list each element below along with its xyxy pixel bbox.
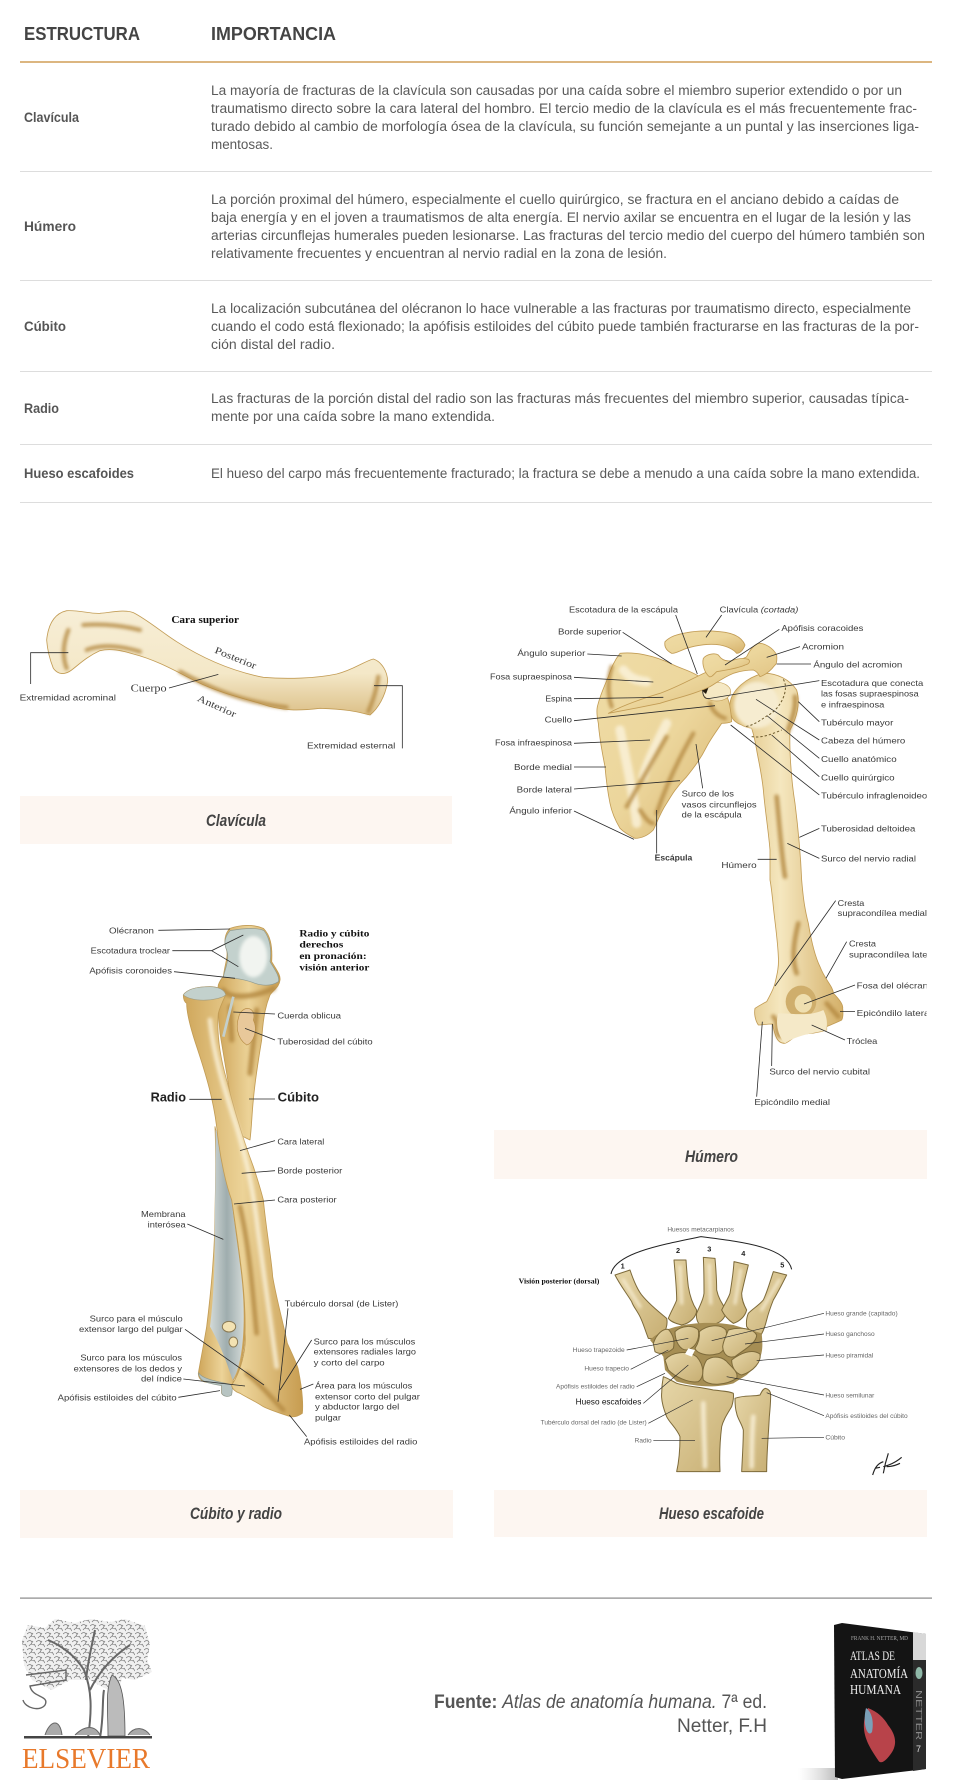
illustration: wrist: [519, 1228, 908, 1475]
leader lines: [158, 929, 313, 1437]
labels: extensor corto del pulgar: [315, 1391, 420, 1401]
labels: Fosa del olécranon: [857, 980, 939, 990]
illustration: shoulder and humerus: [490, 604, 939, 1107]
source credit: Netter, F.H: [677, 1716, 767, 1737]
labels: Apófisis estiloides del cúbito: [58, 1393, 177, 1403]
labels: Escotadura de la escápula: [569, 604, 678, 614]
labels: Hueso semilunar: [825, 1394, 874, 1400]
label: Cuerpo: Cuerpo: [131, 684, 167, 695]
row: Húmero: baja energía y en el joven a traumatismos de alta energía. El nervio axilar se encuentra en el lugar de la lesión y las: [211, 210, 911, 225]
row: Cúbito: La localización subcutánea del olécranon lo hace vulnerable a las fracturas por traumatismo directo, especialmente: [211, 301, 911, 316]
bone: radius: [183, 987, 303, 1417]
labels: Membrana: [141, 1209, 186, 1219]
leader lines: [31, 653, 402, 748]
row: Cúbito: ción distal del radio.: [211, 337, 335, 352]
labels: Cuello anatómico: [821, 754, 897, 764]
labels: Cresta: [849, 939, 876, 949]
labels: extensor largo del pulgar: [79, 1324, 183, 1334]
book cover: Atlas de anatomía humana: FRANK H. NETTER, MD: [851, 1636, 909, 1642]
labels: [541, 1228, 908, 1445]
bones: metacarpals: [615, 1257, 787, 1339]
bone: humerus: [730, 673, 843, 1043]
panel: húmero y escápula: [490, 604, 939, 1107]
book cover: Atlas de anatomía humana: 7: [916, 1744, 921, 1754]
source credit: Fuente: Atlas de anatomía humana. 7ª ed.: [434, 1692, 767, 1713]
labels: Cúbito: [825, 1435, 846, 1441]
label: Visión posterior (dorsal): Visión posterior (dorsal): [519, 1277, 600, 1285]
caption bar: Húmero: [494, 1130, 927, 1179]
labels: Surco del nervio cubital: [769, 1066, 870, 1076]
labels: Húmero: [721, 860, 757, 870]
labels: Escotadura troclear: [91, 945, 170, 955]
labels: Surco del nervio radial: [821, 853, 916, 863]
distal ulna cap: [198, 1373, 233, 1396]
metacarpal numbers: 1: [621, 1261, 625, 1270]
labels: Ángulo superior: [517, 648, 585, 658]
labels: del índice: [141, 1374, 182, 1384]
row: Radio: mente por una caída sobre la mano extendida.: [211, 409, 495, 424]
icon: tree: [22, 1619, 152, 1738]
bone: spine and acromion: [608, 643, 777, 713]
labels: Ángulo inferior: [509, 806, 572, 816]
labels: Tubérculo dorsal del radio (de Lister): [541, 1420, 647, 1426]
heading: Radio y cúbito derechos: derechos: [299, 941, 344, 951]
bone: distal radius: [662, 1377, 734, 1472]
bone: clavicle cut: [665, 631, 745, 653]
scapula details: [609, 667, 731, 823]
labels: Radio: [635, 1439, 652, 1445]
labels: Cresta: [838, 898, 865, 908]
labels: pulgar: [315, 1412, 341, 1422]
labels: Borde posterior: [277, 1165, 342, 1175]
wordmark: ELSEVIER: ELSEVIER: [22, 1744, 150, 1775]
labels: Apófisis estiloides del radio: [304, 1436, 418, 1446]
labels: interósea: [148, 1220, 186, 1230]
labels: Apófisis estiloides del cúbito: [825, 1414, 908, 1420]
table header: [20, 24, 932, 63]
row: Húmero: [20, 192, 932, 281]
metacarpal numbers: 2: [676, 1246, 680, 1255]
caption bar: Húmero: Húmero: [685, 1148, 738, 1166]
row: Clavícula: mentosas.: [211, 137, 273, 152]
labels: Cara posterior: [277, 1195, 337, 1205]
metacarpal numbers: 5: [780, 1260, 784, 1269]
labels: Epicóndilo medial: [754, 1097, 830, 1107]
row: Clavícula: Clavícula: [24, 110, 79, 125]
illustration: ulna and radius: [58, 925, 420, 1446]
leader lines: [574, 615, 855, 1097]
panel: cúbito y radio: [58, 925, 420, 1446]
row: Hueso escafoides: El hueso del carpo más frecuentemente fracturado; la fractura se debe a menudo a una caída sobre la mano extendida.: [211, 466, 920, 481]
row: Cúbito: [20, 301, 932, 372]
labels: Hueso grande (capitado): [825, 1312, 898, 1318]
table header: IMPORTANCIA: [211, 24, 336, 44]
bone: clavicle: [47, 611, 388, 715]
labels: Surco para el músculo: [90, 1314, 183, 1324]
labels: Ángulo del acromion: [813, 660, 903, 670]
labels: extensores radiales largo: [314, 1347, 416, 1357]
radius details: [183, 987, 283, 1410]
labels: Hueso piramidal: [825, 1353, 873, 1359]
row: Húmero: relativamente frecuentes y encuentran al nervio radial en la zona de lesión.: [211, 246, 667, 261]
labels: Fosa supraespinosa: [490, 671, 572, 681]
labels: Área para los músculos: [315, 1381, 413, 1391]
labels: e infraespinosa: [821, 699, 885, 709]
labels: Hueso ganchoso: [825, 1332, 875, 1338]
labels: Apófisis coracoides: [781, 623, 864, 633]
labels: supracondílea lateral: [849, 949, 938, 959]
labels: Cuello: [545, 714, 572, 724]
panel: hueso escafoide: [519, 1228, 908, 1475]
label: Cúbito: Cúbito: [278, 1091, 319, 1105]
humerus details: [734, 679, 838, 1043]
labels: vasos circunflejos: [682, 799, 757, 809]
signature: [873, 1453, 902, 1475]
labels: de la escápula: [682, 810, 742, 820]
labels: las fosas supraespinosa: [821, 689, 919, 699]
book cover: Atlas de anatomía humana: ANATOMÍA: [850, 1666, 908, 1681]
row: Clavícula: traumatismo directo sobre la cara lateral del hombro. El tercio medio de la clavícula es el más frecuentemente frac-: [211, 101, 917, 116]
table header: ESTRUCTURA: [24, 24, 140, 44]
interosseous membrane: [210, 1130, 244, 1380]
label: Radio: Radio: [151, 1091, 186, 1105]
labels: Surco para los músculos: [80, 1353, 183, 1363]
labels: Surco de los: [682, 789, 735, 799]
labels: [58, 925, 420, 1446]
bones: carpals: [653, 1326, 760, 1384]
row: Cúbito: cuando el codo está flexionado; la apófisis estiloides del cúbito puede también fracturarse en las fracturas de la por-: [211, 319, 919, 334]
wrist highlights: [703, 1403, 753, 1467]
book cover: Atlas de anatomía humana: [798, 1623, 926, 1780]
labels: Escápula: [655, 853, 693, 863]
labels: Tuberosidad del cúbito: [277, 1036, 373, 1046]
label: Posterior: Posterior: [213, 645, 259, 672]
table: estructura e importancia: [20, 24, 932, 503]
panel: clavícula: [20, 611, 402, 750]
caption bar: Cúbito y radio: [20, 1490, 453, 1538]
labels: supracondílea medial: [838, 908, 927, 918]
labels: Apófisis coronoides: [89, 966, 173, 976]
book cover: Atlas de anatomía humana: NETTER: [914, 1690, 923, 1740]
row: Húmero: arterias circunflejas humerales pueden lesionarse. Las fracturas del tercio medio del cuerpo del húmero también son: [211, 228, 925, 243]
labels: Huesos metacarpianos: [667, 1228, 734, 1234]
row: Húmero: La porción proximal del húmero, especialmente el cuello quirúrgico, se fractura en el anciano debido a caídas de: [211, 192, 899, 207]
ulnar tuberosity: [237, 1008, 255, 1045]
labels: Clavícula (cortada): [720, 604, 798, 614]
book cover: Atlas de anatomía humana: ATLAS DE: [850, 1648, 895, 1663]
label: Extremidad acrominal: Extremidad acrominal: [20, 692, 116, 702]
labels: Cuerda oblicua: [277, 1011, 341, 1021]
caption bar: Hueso escafoide: [494, 1490, 927, 1537]
heading: Radio y cúbito derechos: visión anterior: [299, 963, 369, 973]
metacarpal numbers: 3: [707, 1244, 711, 1253]
labels: Hueso trapecio: [584, 1367, 630, 1373]
labels: y abductor largo del: [315, 1402, 399, 1412]
label: Extremidad esternal: Extremidad esternal: [307, 740, 395, 750]
labels: Cabeza del húmero: [821, 736, 906, 746]
metacarpal numbers: [621, 1244, 784, 1270]
label: Anterior: Anterior: [195, 693, 238, 721]
metacarpal numbers: 4: [741, 1249, 746, 1258]
row: Radio: Las fracturas de la porción distal del radio son las fracturas más frecuentes del miembro superior, causadas típica-: [211, 391, 909, 406]
labels: Cuello quirúrgico: [821, 772, 895, 782]
labels: Borde superior: [558, 626, 621, 636]
labels: Tróclea: [847, 1036, 878, 1046]
row: Clavícula: La mayoría de fracturas de la clavícula son causadas por una caída sobre el miembro superior extendido o por un: [211, 83, 902, 98]
labels: Tubérculo mayor: [821, 718, 893, 728]
row: Cúbito: Cúbito: [24, 319, 66, 334]
label: Hueso escafoides: Hueso escafoides: [576, 1396, 641, 1406]
carpal mass base: [650, 1323, 762, 1386]
labels: extensores de los dedos y: [74, 1363, 183, 1373]
caption bar: Cúbito y radio: Cúbito y radio: [190, 1505, 282, 1523]
leader lines: [627, 1313, 824, 1441]
labels: Fosa infraespinosa: [495, 738, 572, 748]
logo: Elsevier: [22, 1619, 152, 1775]
bone: coracoid: [703, 654, 749, 677]
labels: Tuberosidad deltoidea: [821, 823, 916, 833]
bone: scapula: [597, 653, 732, 838]
bone: distal ulna: [735, 1388, 771, 1472]
labels: Tubérculo infraglenoideo: [821, 791, 928, 801]
labels: y corto del carpo: [314, 1357, 385, 1367]
row: Radio: Radio: [24, 401, 59, 416]
labels: Epicóndilo lateral: [857, 1008, 932, 1018]
heading: Radio y cúbito derechos: [299, 929, 370, 973]
labels: Cara lateral: [277, 1136, 324, 1146]
labels: [490, 604, 939, 1107]
labels: Olécranon: [109, 925, 154, 935]
caption bar: Hueso escafoide: Hueso escafoide: [659, 1505, 764, 1523]
labels: Hueso trapezoide: [573, 1348, 625, 1354]
source credit: [434, 1692, 767, 1737]
labels: Tubérculo dorsal (de Lister): [285, 1299, 398, 1309]
labels: Surco para los músculos: [314, 1336, 416, 1346]
illustration: clavicle: [20, 611, 402, 750]
heading: Radio y cúbito derechos: en pronación:: [299, 952, 367, 962]
label: Cara superior: Cara superior: [171, 615, 240, 626]
row: Radio: [20, 391, 932, 445]
heading: Radio y cúbito derechos: Radio y cúbito: [299, 929, 370, 939]
row: Clavícula: turado debido al cambio de morfología ósea de la clavícula, su función semejante a un puntal y las inserciones liga-: [211, 119, 919, 134]
labels: Escotadura que conecta: [821, 678, 924, 688]
bracket: metacarpals: [611, 1237, 792, 1274]
caption bar: Clavícula: Clavícula: [206, 812, 266, 830]
ulna articular surface: [223, 929, 279, 985]
book cover: Atlas de anatomía humana: HUMANA: [850, 1682, 901, 1697]
labels: Borde medial: [514, 762, 572, 772]
labels: Apófisis estiloides del radio: [556, 1384, 635, 1390]
row: Húmero: Húmero: [24, 219, 76, 234]
labels: Espina: [545, 694, 572, 704]
labels: Acromion: [802, 641, 844, 651]
caption bar: Clavícula: [20, 796, 452, 844]
bone: distal ulna: [198, 1127, 245, 1396]
row: Hueso escafoides: Hueso escafoides: [24, 466, 134, 481]
row: Hueso escafoides: [20, 466, 932, 503]
row: Clavícula: [20, 83, 932, 172]
labels: Borde lateral: [517, 784, 572, 794]
bone: ulna: [218, 925, 280, 1140]
